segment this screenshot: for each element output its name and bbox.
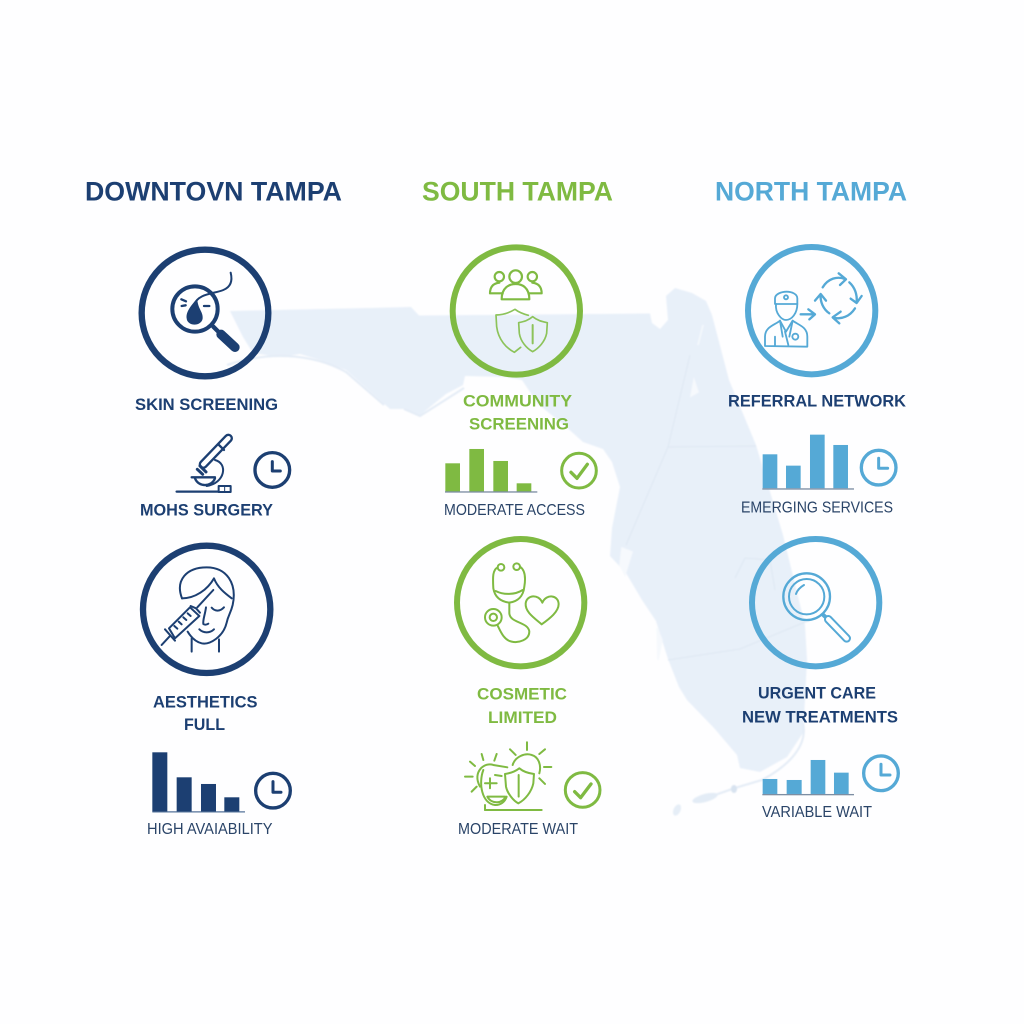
label: cosmetic limited — [477, 684, 567, 727]
label: skin screening: SKIN SCREENING — [135, 395, 278, 414]
icon circle: skin screening magnifier — [142, 250, 268, 376]
panel: North Tampa — [715, 176, 907, 821]
heading: North Tampa: NORTH TAMPA — [715, 176, 907, 206]
bar chart: variable wait — [762, 760, 854, 795]
label: emerging services: EMERGING SERVICES — [741, 500, 893, 516]
icon circle: magnifying glass — [752, 539, 879, 666]
heading: Downtown Tampa: DOWNTOVN TAMPA — [85, 176, 342, 206]
bar chart: high availability — [152, 752, 245, 812]
label: aesthetics full — [153, 692, 258, 734]
label: moderate access: MODERATE ACCESS — [444, 502, 585, 519]
label: community screening: SCREENING — [469, 414, 569, 434]
label: variable wait: VARIABLE WAIT — [762, 804, 872, 821]
label: urgent care new treatments: URGENT CARE — [758, 684, 876, 702]
icon circle: community and shields — [453, 247, 580, 375]
icon: clock — [861, 450, 896, 485]
label: cosmetic limited: LIMITED — [488, 708, 557, 727]
panel: Downtown Tampa — [85, 176, 342, 838]
icon circle: stethoscope and heart — [457, 539, 584, 666]
heading: South Tampa: SOUTH TAMPA — [422, 176, 613, 206]
label: urgent care new treatments — [742, 684, 898, 726]
label: high availability: HIGH AVAIABILITY — [147, 821, 273, 838]
label: referral network: REFERRAL NETWORK — [728, 392, 907, 410]
label: Mohs surgery: MOHS SURGERY — [140, 500, 274, 520]
icon: check circle — [565, 773, 600, 807]
icon: face, shield and sun — [465, 742, 551, 810]
label: urgent care new treatments: NEW TREATMENTS — [742, 708, 898, 726]
panel: South Tampa — [422, 176, 613, 838]
icon circle: aesthetics face and syringe — [143, 546, 270, 673]
label: aesthetics full: FULL — [184, 715, 225, 734]
icon: microscope — [177, 438, 231, 492]
label: cosmetic limited: COSMETIC — [477, 684, 567, 704]
bar chart: moderate access — [445, 449, 537, 493]
icon: clock — [256, 773, 290, 808]
label: community screening: COMMUNITY — [463, 392, 573, 410]
icon: check circle — [562, 453, 596, 488]
label: aesthetics full: AESTHETICS — [153, 692, 258, 712]
label: community screening — [463, 392, 573, 434]
background map of Florida — [227, 288, 810, 817]
label: moderate wait: MODERATE WAIT — [458, 821, 578, 838]
icon circle: doctor referral cycle — [748, 247, 875, 374]
icon: clock — [864, 756, 898, 791]
icon: clock — [255, 453, 290, 487]
bar chart: emerging services — [762, 435, 854, 490]
